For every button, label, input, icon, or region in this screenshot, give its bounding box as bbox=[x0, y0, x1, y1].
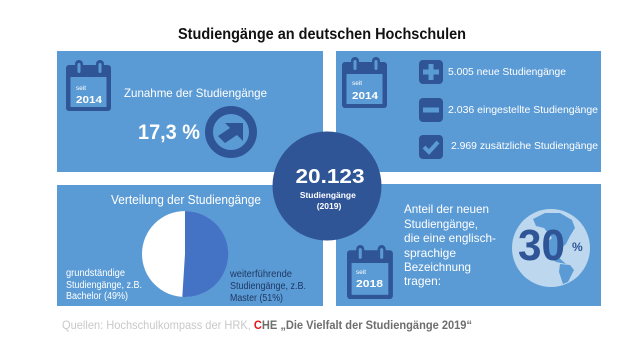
icon: plus bbox=[419, 60, 443, 84]
centre circle: total bbox=[272, 132, 382, 240]
icon: check bbox=[419, 135, 443, 159]
text: Anteil: Anteil der neuen bbox=[404, 202, 489, 216]
icon: calendar seit 2018: seit bbox=[356, 269, 366, 276]
source line: Quellen: Hochschulkompass der HRK, CHE „Die Vielfalt der Studiengänge 2019“ bbox=[62, 318, 472, 332]
panel: Veränderungen seit 2014 bbox=[336, 51, 601, 172]
heading: Zunahme: Zunahme der Studiengänge bbox=[124, 86, 267, 100]
icon: calendar seit 2014 bbox=[66, 60, 111, 111]
label: grundständige: grundständige bbox=[66, 268, 125, 279]
text: eingestellte Studiengänge: 2.036 eingestellte Studiengänge bbox=[448, 104, 598, 116]
icon: calendar seit 2014: seit bbox=[352, 80, 362, 87]
icon: calendar seit 2014: 2014 bbox=[76, 95, 103, 106]
text: Anteil: die eine englisch- bbox=[404, 231, 496, 245]
label: grundständige: Bachelor (49%) bbox=[66, 291, 128, 302]
panel: Verteilung der Studiengänge bbox=[57, 185, 323, 306]
label: Studiengänge (2019): (2019) bbox=[317, 201, 341, 211]
label: weiterführende: weiterführende bbox=[229, 269, 292, 280]
icon: calendar seit 2014: 2014 bbox=[352, 91, 379, 102]
icon: globe with 30 %: % bbox=[572, 240, 583, 254]
icon: calendar seit 2014 bbox=[342, 57, 387, 108]
pie chart bbox=[142, 211, 228, 297]
text: neue Studiengänge: 5.005 neue Studiengänge bbox=[448, 66, 566, 78]
value: 20.123: 20.123 bbox=[296, 166, 364, 188]
icon: calendar seit 2018 bbox=[347, 245, 393, 299]
icon: globe with 30 % bbox=[512, 209, 590, 287]
text: Anteil: sprachige bbox=[404, 246, 456, 260]
text: Anteil: Studiengänge, bbox=[404, 217, 478, 231]
icon: globe with 30 %: 30 bbox=[518, 221, 565, 270]
text: zusätzliche Studiengänge: 2.969 zusätzliche Studiengänge bbox=[451, 140, 598, 152]
icon: calendar seit 2018: 2018 bbox=[356, 279, 384, 290]
text: Anteil: Bezeichnung bbox=[404, 260, 471, 274]
text: Anteil: tragen: bbox=[404, 274, 441, 288]
panel: Zunahme der Studiengänge bbox=[57, 51, 323, 172]
icon: minus bbox=[419, 98, 443, 122]
panel: Anteil der neuen Studiengänge bbox=[336, 184, 601, 306]
label: Studiengänge (2019): Studiengänge bbox=[300, 190, 356, 200]
heading: Verteilung: Verteilung der Studiengänge bbox=[111, 192, 261, 207]
label: weiterführende: Studiengänge, z.B. bbox=[230, 281, 306, 292]
label: grundständige: Studiengänge, z.B. bbox=[66, 280, 142, 291]
label: weiterführende: Master (51%) bbox=[230, 293, 283, 304]
icon: calendar seit 2014: seit bbox=[76, 85, 86, 92]
value: 17,3 %: 17,3 % bbox=[138, 121, 200, 144]
title: Studiengänge an deutschen Hochschulen bbox=[178, 26, 466, 43]
icon: up-right arrow in ring bbox=[209, 110, 253, 154]
